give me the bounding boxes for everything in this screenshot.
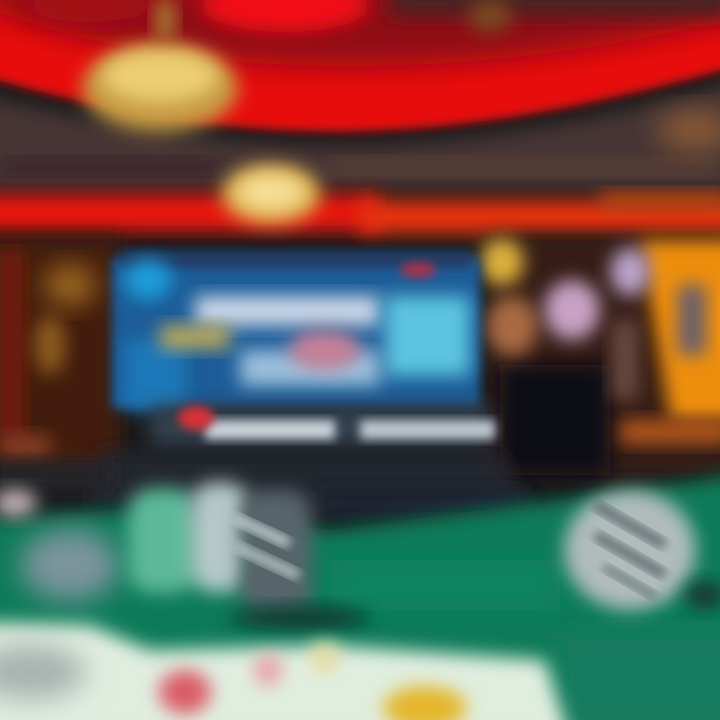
panel: keyboard console bbox=[0, 452, 530, 518]
panel: large blue screen bbox=[112, 250, 495, 447]
panel: red ceiling bbox=[0, 0, 720, 132]
icon: large chandelier bbox=[82, 0, 238, 132]
panel: dark ceiling band bbox=[0, 78, 720, 190]
icon: poker chips right bbox=[564, 490, 720, 610]
panel: green table bbox=[0, 475, 720, 720]
panel: white playing card area bbox=[0, 622, 570, 720]
panel: left wall bbox=[0, 236, 120, 468]
panel: right slot machines bbox=[480, 236, 720, 476]
icon: poker chips left bbox=[0, 482, 370, 630]
panel: red horizontal band bbox=[0, 192, 720, 234]
icon: small chandelier bbox=[221, 164, 321, 224]
